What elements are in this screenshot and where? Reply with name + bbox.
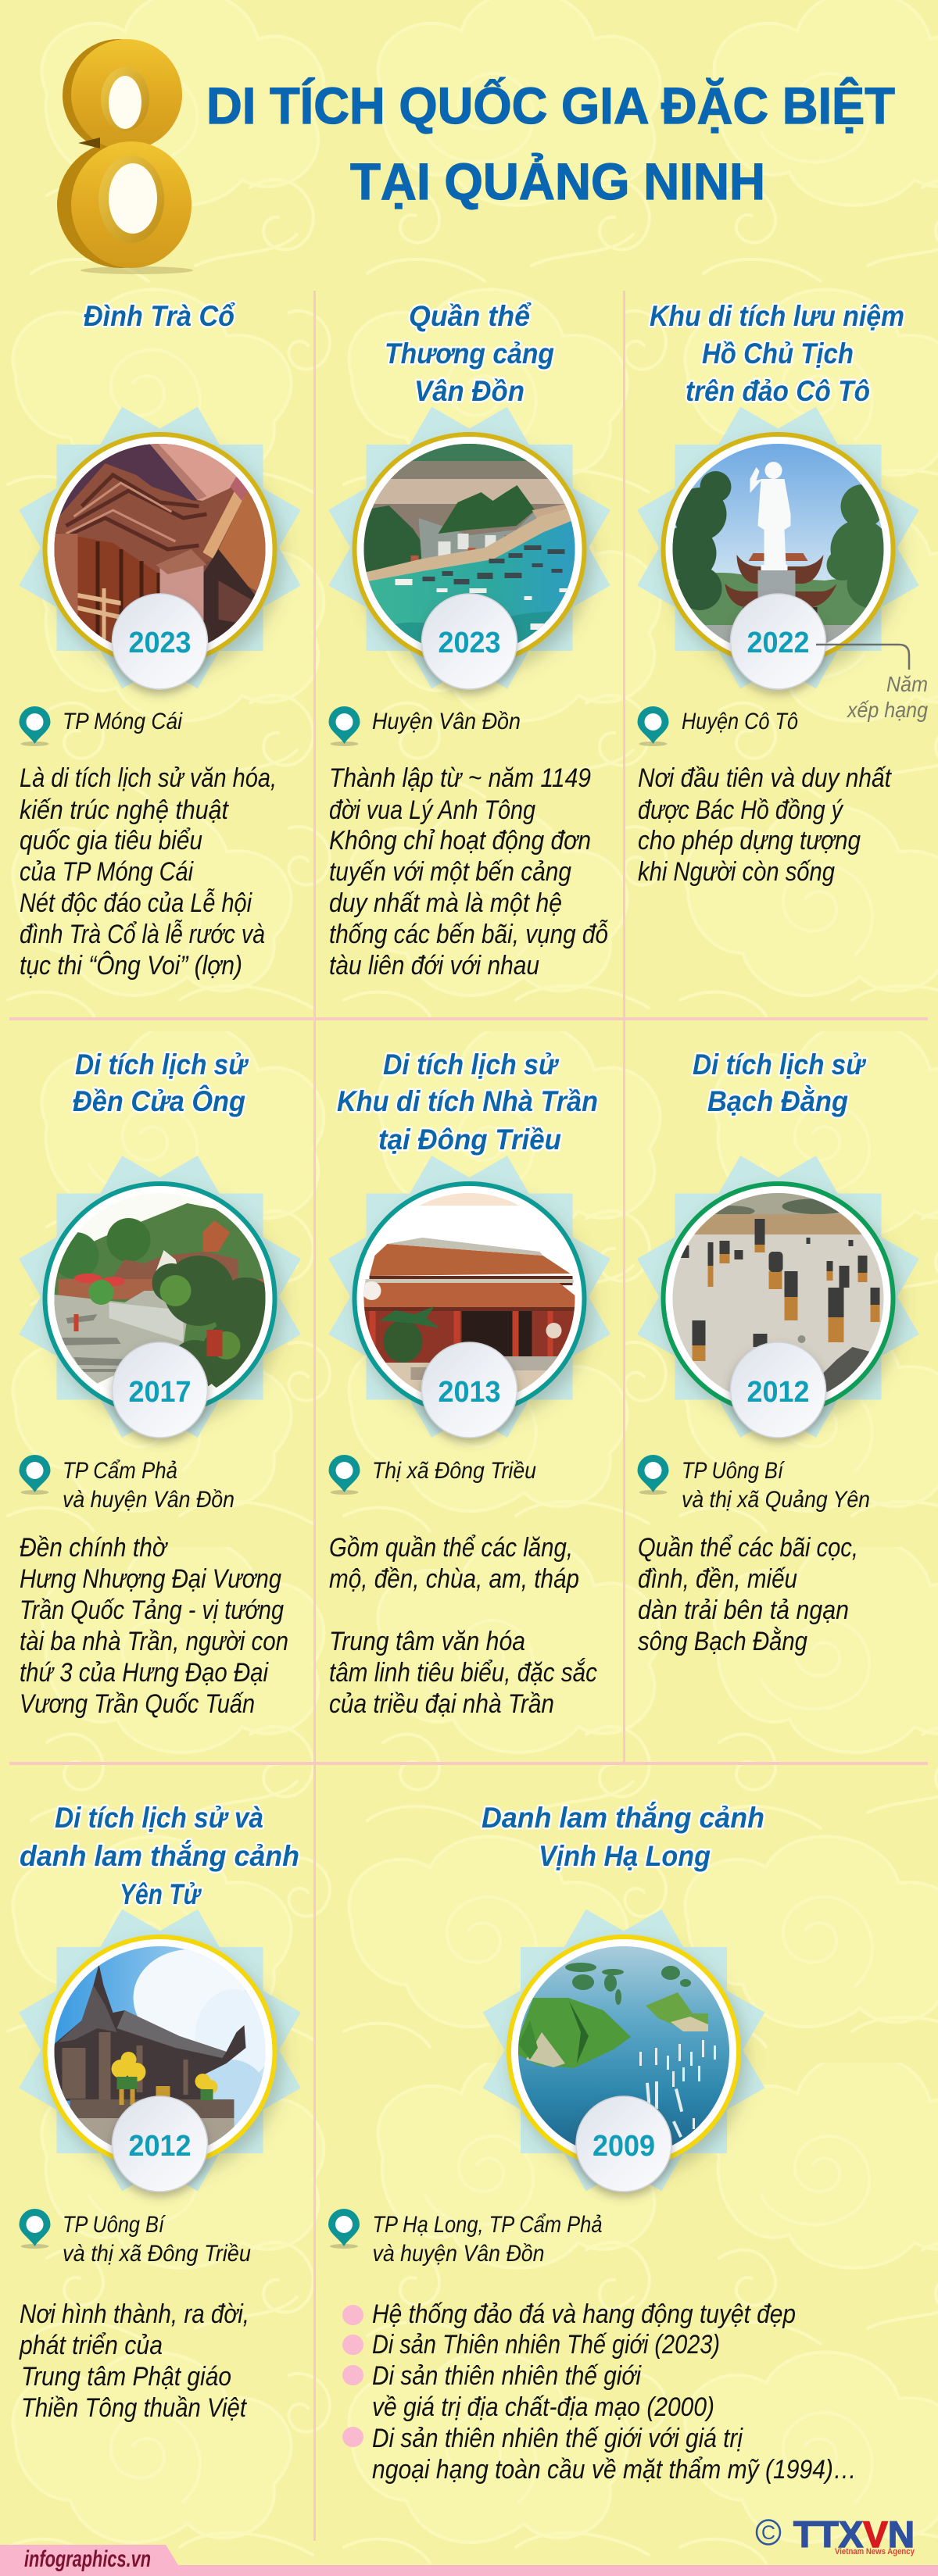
description bbox=[638, 1533, 858, 1656]
description bbox=[329, 763, 608, 981]
footer band: infographics.vn bbox=[24, 2546, 151, 2572]
location: và thị xã Đông Triều bbox=[63, 2241, 251, 2267]
star backdrop bbox=[19, 407, 301, 688]
callout: year of ranking: Năm bbox=[886, 672, 928, 696]
description: được Bác Hồ đồng ý bbox=[638, 795, 844, 825]
photo: Vân Đồn harbour bbox=[364, 444, 575, 655]
description: đình, đền, miếu bbox=[638, 1564, 797, 1594]
star backdrop bbox=[637, 407, 919, 688]
bullet list bbox=[342, 2299, 857, 2485]
heading: Di tích lịch sử bbox=[693, 1049, 866, 1081]
year badge: 2013 bbox=[438, 1376, 500, 1409]
photo ring bbox=[355, 434, 585, 664]
location: và huyện Vân Đồn bbox=[63, 1487, 234, 1513]
description: Nơi hình thành, ra đời, bbox=[20, 2299, 249, 2329]
description: Vương Trần Quốc Tuấn bbox=[20, 1689, 255, 1719]
year badge: 2022 bbox=[747, 627, 810, 659]
year badge bbox=[422, 1342, 517, 1438]
year badge bbox=[113, 2096, 208, 2192]
description: phát triển của bbox=[19, 2331, 163, 2360]
description bbox=[20, 1533, 288, 1719]
star backdrop bbox=[328, 1156, 610, 1438]
description: mộ, đền, chùa, am, tháp bbox=[329, 1564, 579, 1594]
heading: tại Đông Triều bbox=[378, 1124, 561, 1156]
logo: TTXVN: Vietnam News Agency bbox=[835, 2547, 915, 2556]
panel: Yên Tử bbox=[19, 1802, 301, 2423]
location: TP Uông Bí bbox=[682, 1458, 785, 1484]
photo ring bbox=[355, 1184, 585, 1413]
icon: gold number 8 bbox=[57, 39, 193, 274]
callout: year of ranking bbox=[816, 645, 928, 722]
year badge: 2012 bbox=[747, 1376, 810, 1409]
location: Huyện Cô Tô bbox=[682, 709, 798, 734]
star backdrop bbox=[19, 1156, 301, 1438]
heading: Bạch Đằng bbox=[707, 1084, 848, 1117]
description: dàn trải bên tả ngạn bbox=[638, 1595, 849, 1625]
year badge bbox=[422, 594, 517, 689]
star backdrop bbox=[483, 1910, 764, 2191]
heading: trên đảo Cô Tô bbox=[686, 375, 870, 407]
description: kiến trúc nghệ thuật bbox=[20, 795, 229, 825]
location bbox=[328, 706, 521, 746]
description: Quần thể các bãi cọc, bbox=[638, 1533, 858, 1563]
star backdrop bbox=[19, 1910, 301, 2191]
year badge: 2023 bbox=[128, 627, 191, 659]
location bbox=[638, 1455, 870, 1513]
footer band bbox=[0, 2545, 938, 2576]
photo ring bbox=[509, 1937, 739, 2167]
photo ring bbox=[660, 434, 894, 664]
photo ring bbox=[663, 1184, 893, 1413]
location: TP Hạ Long, TP Cẩm Phả bbox=[372, 2212, 602, 2238]
photo: Nhà Trần temple hall bbox=[363, 1193, 575, 1404]
location: Thị xã Đông Triều bbox=[372, 1458, 536, 1484]
heading: Khu di tích Nhà Trần bbox=[337, 1085, 598, 1117]
description: đình Trà Cổ là lễ rước và bbox=[20, 920, 265, 949]
heading: Hồ Chủ Tịch bbox=[702, 338, 854, 370]
panel: Đền Cửa Ông bbox=[19, 1049, 301, 1719]
location bbox=[19, 1455, 234, 1513]
panel: Khu di tích Nhà Trần bbox=[328, 1049, 610, 1719]
description: Nơi đầu tiên và duy nhất bbox=[638, 763, 892, 793]
heading bbox=[693, 1049, 866, 1117]
photo ring bbox=[31, 1184, 278, 1420]
description: quốc gia tiêu biểu bbox=[20, 826, 202, 856]
description: Thiền Tông thuần Việt bbox=[21, 2393, 247, 2423]
photo: Yên Tử pagoda bbox=[55, 1946, 274, 2157]
heading: Đình Trà Cổ bbox=[84, 300, 235, 332]
description: tài ba nhà Trần, người con bbox=[20, 1627, 288, 1656]
description bbox=[19, 2299, 249, 2423]
description: tục thi “Ông Voi” (lợn) bbox=[20, 951, 242, 981]
callout: year of ranking: xếp hạng bbox=[846, 698, 928, 722]
heading: Di tích lịch sử bbox=[75, 1049, 249, 1081]
description: thứ 3 của Hưng Đạo Đại bbox=[20, 1658, 269, 1688]
title: DI TÍCH QUỐC GIA ĐẶC BIỆT bbox=[206, 77, 895, 134]
location bbox=[328, 1455, 536, 1495]
location bbox=[19, 2209, 251, 2267]
heading bbox=[385, 300, 554, 407]
heading: Quần thể bbox=[409, 300, 532, 332]
description: Đền chính thờ bbox=[20, 1533, 168, 1563]
description bbox=[20, 763, 277, 981]
heading bbox=[73, 1049, 249, 1117]
bullet list: Di sản thiên nhiên thế giới với giá trị bbox=[372, 2424, 743, 2453]
description: Hưng Nhượng Đại Vương bbox=[20, 1564, 281, 1594]
description: duy nhất mà là một hệ bbox=[329, 888, 562, 918]
photo: Cửa Ông temple on hillside bbox=[55, 1193, 266, 1391]
heading: Yên Tử bbox=[120, 1878, 202, 1910]
photo: Hồ Chí Minh statue on Cô Tô bbox=[672, 444, 883, 643]
description: Trung tâm Phật giáo bbox=[21, 2362, 231, 2392]
location: TP Uông Bí bbox=[63, 2212, 166, 2238]
year badge bbox=[730, 1342, 825, 1438]
description: Không chỉ hoạt động đơn bbox=[329, 826, 591, 856]
year badge bbox=[113, 1342, 208, 1438]
description: của triều đại nhà Trần bbox=[329, 1689, 554, 1719]
photo ring bbox=[45, 434, 275, 664]
description: Là di tích lịch sử văn hóa, bbox=[20, 763, 277, 793]
heading: Di tích lịch sử bbox=[383, 1049, 559, 1081]
description: tuyến với một bến cảng bbox=[329, 857, 571, 887]
heading: Di tích lịch sử và bbox=[55, 1802, 263, 1834]
photo ring bbox=[45, 1937, 275, 2167]
year badge: 2017 bbox=[128, 1376, 191, 1409]
year badge: 2012 bbox=[128, 2130, 191, 2163]
location: và huyện Vân Đồn bbox=[372, 2241, 544, 2267]
description bbox=[329, 1533, 597, 1719]
bullet list: Di sản thiên nhiên thế giới bbox=[372, 2361, 642, 2391]
year badge bbox=[576, 2096, 671, 2192]
location: TP Cẩm Phả bbox=[63, 1458, 177, 1484]
description: Trung tâm văn hóa bbox=[329, 1627, 525, 1656]
year badge: 2023 bbox=[438, 627, 500, 659]
description bbox=[638, 763, 892, 887]
bullet list: Hệ thống đảo đá và hang động tuyệt đẹp bbox=[372, 2299, 796, 2329]
bullet list: ngoại hạng toàn cầu về mặt thẩm mỹ (1994)… bbox=[372, 2455, 857, 2485]
star backdrop bbox=[637, 1156, 919, 1438]
description: tâm linh tiêu biểu, đặc sắc bbox=[329, 1658, 597, 1688]
location: Huyện Vân Đồn bbox=[372, 709, 521, 734]
heading bbox=[650, 300, 904, 407]
photo: Hạ Long bay islands bbox=[518, 1946, 729, 2157]
title: TẠI QUẢNG NINH bbox=[350, 152, 765, 210]
heading: Đền Cửa Ông bbox=[73, 1084, 245, 1117]
location bbox=[638, 706, 798, 746]
year badge bbox=[113, 594, 208, 689]
description: khi Người còn sống bbox=[638, 857, 835, 887]
description: tàu liên đới với nhau bbox=[329, 951, 539, 981]
panel: Đình Trà Cổ bbox=[19, 300, 301, 981]
location bbox=[19, 706, 183, 746]
panel: Khu di tích lưu niệm Hồ Chủ Tịch bbox=[637, 300, 928, 887]
bullet list: về giá trị địa chất-địa mạo (2000) bbox=[372, 2392, 714, 2422]
logo: TTXVN: C bbox=[761, 2522, 775, 2544]
heading: Vân Đồn bbox=[414, 375, 524, 407]
heading: Danh lam thắng cảnh bbox=[482, 1801, 764, 1834]
description: Nét độc đáo của Lễ hội bbox=[20, 888, 252, 918]
description: của TP Móng Cái bbox=[20, 857, 194, 887]
star backdrop bbox=[328, 407, 610, 688]
heading: Thương cảng bbox=[385, 338, 554, 370]
description: Gồm quần thể các lăng, bbox=[329, 1533, 573, 1563]
location: TP Móng Cái bbox=[63, 709, 183, 734]
heading bbox=[482, 1801, 764, 1872]
photo: Bạch Đằng stakes in water bbox=[672, 1193, 883, 1404]
title bbox=[206, 77, 895, 210]
panel: Vịnh Hạ Long bbox=[328, 1801, 857, 2485]
heading: danh lam thắng cảnh bbox=[20, 1839, 299, 1872]
description: sông Bạch Đằng bbox=[638, 1627, 807, 1656]
description: cho phép dựng tượng bbox=[638, 826, 861, 856]
year badge bbox=[730, 594, 825, 689]
panel: Bạch Đằng bbox=[637, 1049, 919, 1656]
panel: Quần thể Thương cảng Vân Đồn bbox=[328, 300, 610, 981]
year badge: 2009 bbox=[593, 2130, 655, 2163]
description: Trần Quốc Tảng - vị tướng bbox=[20, 1595, 284, 1625]
logo: TTXVN: TTXVN bbox=[793, 2513, 915, 2555]
description: Thành lập từ ~ năm 1149 bbox=[329, 763, 591, 793]
description: thống các bến bãi, vụng đỗ bbox=[329, 920, 608, 949]
location bbox=[328, 2209, 602, 2267]
heading bbox=[337, 1049, 598, 1156]
photo: carved wooden roof bbox=[55, 444, 266, 655]
heading bbox=[20, 1802, 299, 1910]
location: và thị xã Quảng Yên bbox=[682, 1487, 870, 1513]
bullet list: Di sản Thiên nhiên Thế giới (2023) bbox=[372, 2330, 720, 2360]
heading: Khu di tích lưu niệm bbox=[650, 300, 904, 332]
description: đời vua Lý Anh Tông bbox=[329, 795, 535, 825]
heading: Vịnh Hạ Long bbox=[539, 1840, 711, 1872]
